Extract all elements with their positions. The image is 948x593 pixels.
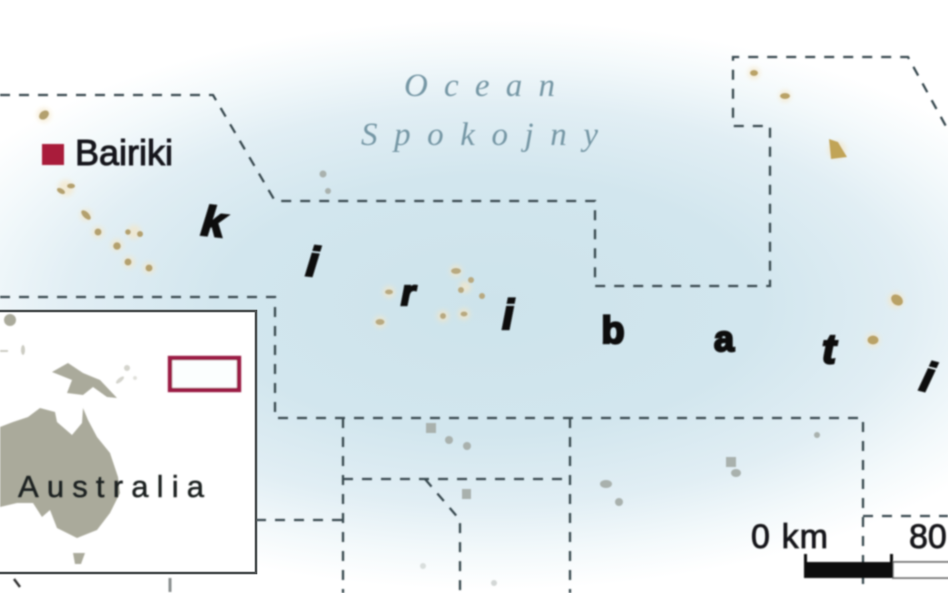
scale labels: 0 km: [751, 518, 828, 556]
capital marker and label: Bairiki: Bairiki: [75, 132, 173, 173]
country name: Kiribati: i: [304, 238, 322, 286]
country name: Kiribati: [199, 197, 940, 401]
ocean label: Ocean: [404, 68, 555, 104]
land masses: [0, 314, 137, 564]
Australia landmass: [0, 408, 120, 538]
western group: [37, 108, 152, 272]
island halos: [37, 67, 904, 347]
country name: Kiribati: i: [916, 353, 940, 401]
ocean label: [361, 68, 598, 153]
country name: Kiribati: k: [199, 197, 230, 246]
Kiribati locator rectangle: [170, 358, 239, 390]
country name: Kiribati: t: [822, 325, 838, 372]
central group: [376, 268, 485, 325]
inset locator map: [0, 311, 256, 573]
marks below inset: [14, 578, 170, 592]
eastern group: [750, 70, 905, 344]
country name: Kiribati: b: [601, 310, 625, 352]
Tasmania: [73, 553, 85, 564]
neighbouring islands: [320, 170, 820, 586]
country name: Kiribati: i: [502, 291, 515, 338]
scale bar: [751, 518, 948, 578]
Kiribati islands: [37, 67, 905, 347]
scale bar: 80: [909, 518, 947, 556]
country name: Kiribati: r: [401, 272, 417, 313]
Australia label: Australia: [18, 469, 205, 504]
ocean label: Spokojny: [361, 117, 598, 153]
country name: Kiribati: a: [714, 318, 735, 359]
New Guinea: [52, 363, 117, 398]
